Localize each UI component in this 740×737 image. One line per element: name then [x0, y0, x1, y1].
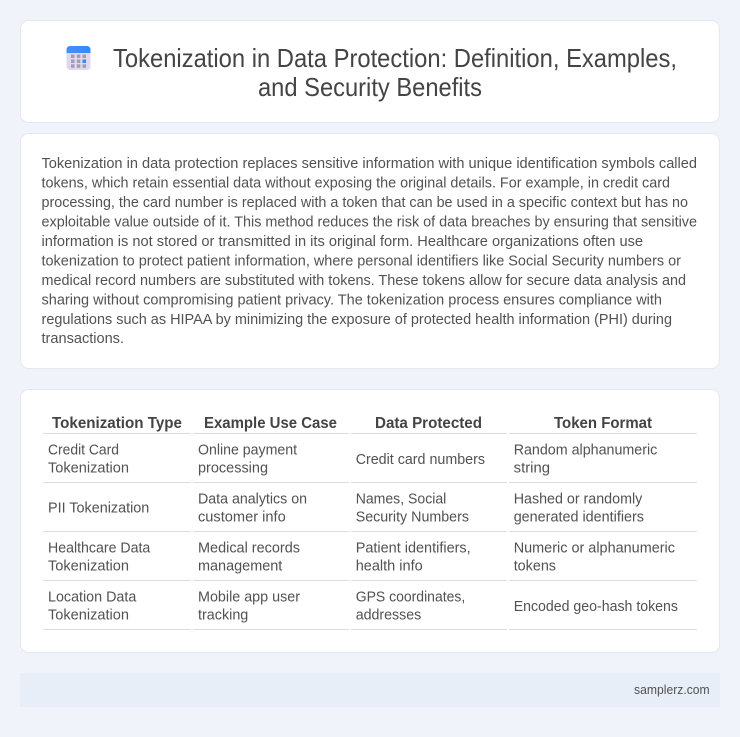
- table row: healthcare: Numeric or alphanumeric: [514, 540, 675, 556]
- table row: PII: Names, Social: [356, 492, 446, 508]
- table row: credit card: Credit card numbers: [356, 452, 485, 468]
- table row: PII: PII Tokenization: [48, 500, 149, 516]
- table row: PII: Data analytics on: [198, 492, 307, 508]
- footer: samplerz.com: [634, 683, 710, 697]
- panel: title header: [20, 20, 720, 122]
- table row: healthcare: Tokenization: [48, 558, 129, 574]
- icon: calendar: [66, 46, 90, 70]
- table row: location: addresses: [356, 608, 421, 624]
- table row: credit card: [48, 442, 657, 476]
- text block: description paragraph: medical record numbers are substituted with tokens. These tokens allow for secure data analysis and: [42, 273, 686, 289]
- text block: description paragraph: transactions.: [42, 331, 124, 347]
- table row: credit card: Random alphanumeric: [514, 442, 657, 458]
- table row: credit card: Credit Card: [48, 442, 119, 458]
- table header row: [52, 415, 653, 432]
- panel: description: [20, 134, 720, 368]
- table row: location: Location Data: [48, 590, 137, 606]
- panel: table: [20, 390, 720, 652]
- table row: location: tracking: [198, 608, 248, 624]
- table row: healthcare: tokens: [514, 558, 556, 574]
- table row: healthcare: health info: [356, 558, 423, 574]
- title: and Security Benefits: [258, 72, 482, 102]
- table row: PII: Security Numbers: [356, 510, 469, 526]
- table row: healthcare: Healthcare Data: [48, 540, 151, 556]
- table row: location: Mobile app user: [198, 590, 300, 606]
- table header row: Token Format: [554, 415, 653, 432]
- table row: PII: Hashed or randomly: [514, 492, 643, 508]
- table row: healthcare: Patient identifiers,: [356, 540, 471, 556]
- footer: [20, 673, 720, 707]
- text block: description paragraph: [42, 156, 697, 347]
- table row: location: Encoded geo-hash tokens: [514, 599, 678, 615]
- title: Tokenization in Data Protection: Definition, Examples,: [113, 43, 677, 73]
- text block: description paragraph: information is not stored or transmitted in its original form. Healthcare organizations often use: [42, 234, 643, 250]
- table header row: Data Protected: [375, 415, 482, 432]
- title: [113, 43, 677, 102]
- text block: description paragraph: Tokenization in data protection replaces sensitive information with unique identification symbols called: [42, 156, 697, 172]
- text block: description paragraph: regulations such as HIPAA by minimizing the exposure of protected health information (PHI) during: [42, 312, 672, 328]
- text block: description paragraph: exploitable value outside of it. This method reduces the risk of data breaches by ensuring that sensitive: [42, 214, 697, 230]
- table row: location: Tokenization: [48, 608, 129, 624]
- table row: credit card: processing: [198, 460, 268, 476]
- table header row: Tokenization Type: [52, 415, 182, 432]
- table row: healthcare: management: [198, 558, 282, 574]
- table row: PII: generated identifiers: [514, 510, 644, 526]
- table header row: Example Use Case: [204, 415, 337, 432]
- text block: description paragraph: tokens, which retain essential data without exposing the original details. For example, in credit card: [42, 176, 670, 192]
- table row: PII: [48, 492, 644, 526]
- table row: PII: customer info: [198, 510, 286, 526]
- text block: description paragraph: tokenization to protect patient information, where personal identifiers like Social Security numbers or: [42, 254, 681, 270]
- table row: location: [48, 590, 678, 624]
- table row: healthcare: Medical records: [198, 540, 300, 556]
- table row: credit card: Online payment: [198, 442, 297, 458]
- table row: credit card: Tokenization: [48, 460, 129, 476]
- text block: description paragraph: processing, the card number is replaced with a token that can be used in a specific context but has no: [42, 195, 688, 211]
- text block: description paragraph: sharing without compromising patient privacy. The tokenization process ensures compliance with: [42, 292, 662, 308]
- table row: location: GPS coordinates,: [356, 590, 465, 606]
- table row: healthcare: [48, 540, 675, 574]
- table row: credit card: string: [514, 460, 550, 476]
